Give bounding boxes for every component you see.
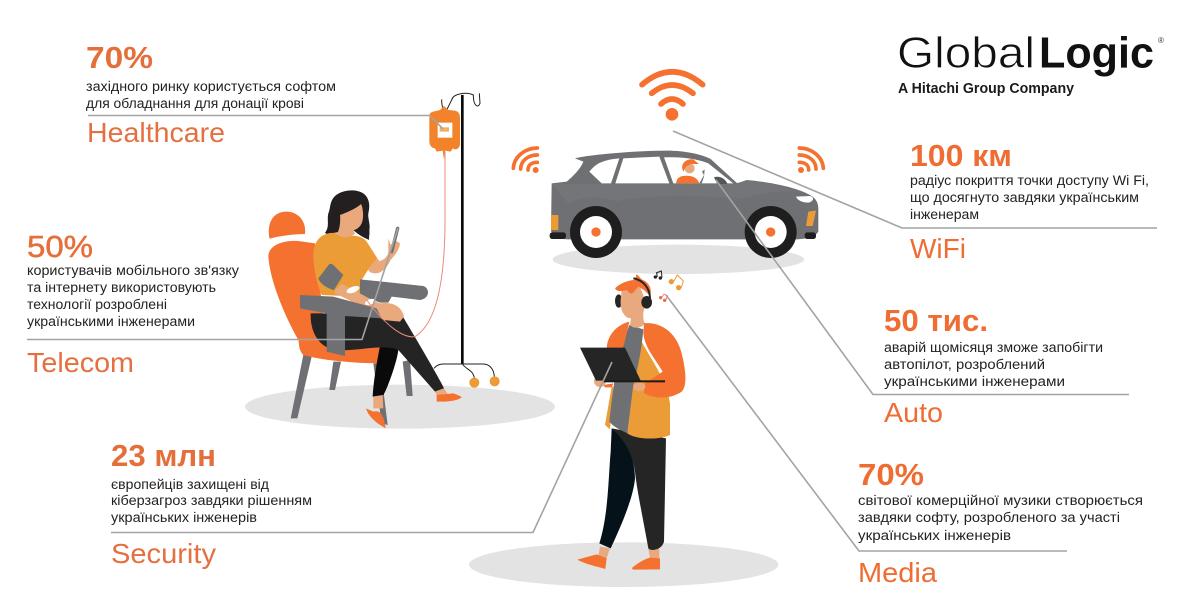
stat: 70 percent healthcare: 70% [86, 40, 153, 75]
label: Telecom: Telecom [27, 347, 134, 378]
panel: WiFi [673, 131, 1157, 264]
description: telecom [27, 263, 239, 329]
description: auto: аварій щомісяця зможе запобігти [884, 340, 1103, 356]
description: telecom: користувачів мобільного зв'язку [27, 263, 239, 278]
stat: 70 percent media: 70% [858, 457, 924, 492]
description: security: українських інженерів [111, 510, 257, 525]
panel: Security [111, 362, 612, 569]
description: healthcare: західного ринку користується софтом [86, 79, 336, 94]
label: Healthcare: Healthcare [87, 117, 225, 148]
stat: 23 million: 23 млн [111, 438, 216, 473]
description: security: європейців захищені від [111, 477, 269, 492]
icon: wifi left [513, 148, 539, 173]
description: security [111, 477, 312, 525]
illustration: woman donating blood [245, 93, 555, 429]
description: auto: автопілот, розроблений [884, 357, 1045, 373]
logo: GlobalLogic: A Hitachi Group Company [898, 81, 1074, 97]
connector: security [111, 362, 612, 532]
description: auto [884, 340, 1103, 390]
description: wifi: що досягнуто завдяки українським [910, 190, 1139, 206]
label: Security: Security [111, 538, 216, 569]
connector: wifi [673, 131, 1157, 228]
description: security: кіберзагроз завдяки рішенням [111, 493, 312, 508]
logo: GlobalLogic [897, 28, 1164, 97]
icon: music notes [654, 271, 683, 302]
description: media [858, 493, 1143, 544]
logo: GlobalLogic: ® [1158, 36, 1164, 45]
connector: healthcare [88, 116, 443, 129]
description: healthcare [86, 79, 336, 111]
connector: auto [716, 180, 1129, 394]
description: media: українських інженерів [858, 528, 1011, 544]
label: Auto: Auto [884, 397, 943, 428]
connector: media [666, 295, 1067, 551]
stat: 50 thousand: 50 тис. [884, 303, 988, 338]
stat: 50 percent telecom: 50% [27, 229, 93, 264]
description: media: завдяки софту, розробленого за участі [858, 510, 1120, 526]
description: telecom: технології розроблені [27, 297, 167, 312]
panel: Auto [716, 180, 1129, 428]
label: Media: Media [858, 557, 937, 588]
stat: 100 km: 100 км [910, 138, 1012, 173]
illustration: car with wifi signals [513, 72, 823, 274]
panel: Telecom [27, 228, 398, 378]
description: auto: українськими інженерами [884, 374, 1065, 390]
description: telecom: та інтернету використовують [27, 280, 216, 295]
description: telecom: українськими інженерами [27, 314, 195, 329]
description: healthcare: для обладнання для донації крові [86, 96, 304, 111]
panel: Healthcare [86, 40, 443, 148]
label: WiFi: WiFi [910, 233, 966, 264]
icon: wifi right [798, 148, 823, 173]
illustration: man with laptop and headphones [469, 271, 778, 587]
panel: Media [666, 295, 1143, 588]
description: wifi: радіус покриття точки доступу Wi Fi, [910, 173, 1149, 189]
description: wifi [910, 173, 1149, 223]
description: wifi: інженерам [910, 207, 979, 223]
logo: GlobalLogic: Global [897, 28, 1035, 78]
connector: telecom [27, 228, 398, 340]
icon: wifi top [642, 72, 703, 121]
description: media: світової комерційної музики створюється [858, 493, 1143, 509]
logo: GlobalLogic: Logic [1039, 28, 1154, 78]
